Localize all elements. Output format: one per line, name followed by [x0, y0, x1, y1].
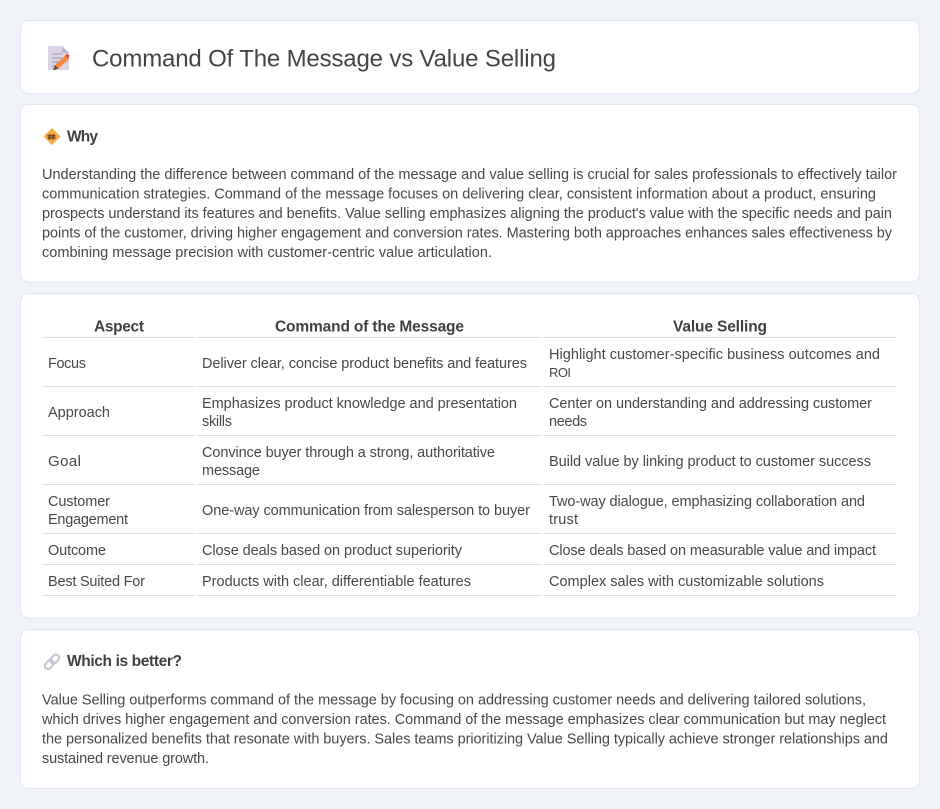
panel: which is better	[20, 630, 920, 788]
table row: focus: ROI	[549, 365, 571, 380]
table row: goal: message	[202, 463, 260, 479]
table row: focus: Deliver clear, concise product benefits and features	[202, 356, 527, 372]
text block: why paragraph: Understanding the difference between command of the message and value selling is crucial for sales professionals to effectively tailor	[42, 167, 897, 183]
table row: best suited for: Products with clear, differentiable features	[202, 574, 471, 590]
text block: which is better paragraph: Value Selling outperforms command of the message by focusing on addressing customer needs and delivering tailored solutions,	[42, 692, 866, 708]
icon: link	[43, 653, 61, 670]
text block: why paragraph	[42, 167, 897, 261]
table row: outcome: Close deals based on measurable value and impact	[549, 543, 876, 559]
table row: goal	[48, 445, 871, 479]
table row: goal: Convince buyer through a strong, authoritative	[202, 445, 495, 461]
table row: best suited for	[48, 574, 824, 590]
table row: customer engagement: Two-way dialogue, emphasizing collaboration and	[549, 494, 865, 510]
text block: why paragraph: prospects understand its features and benefits. Value selling emphasizes aligning the product's value with the specific needs and pain	[42, 206, 892, 222]
table header row	[94, 318, 767, 336]
text block: why paragraph: combining message precision with customer-centric value articulation.	[42, 245, 492, 261]
table row: approach: Approach	[48, 405, 110, 421]
table row: outcome: Outcome	[48, 543, 106, 559]
table row: focus: Highlight customer-specific business outcomes and	[549, 347, 880, 363]
text block: why paragraph: communication strategies. Command of the message focuses on delivering clear, consistent information about a product, ensuring	[42, 186, 876, 202]
table row: customer engagement: One-way communication from salesperson to buyer	[202, 503, 530, 519]
text block: which is better paragraph: the personalized benefits that resonate with buyers. Sales teams prioritizing Value Selling typically achieve stronger relationships and	[42, 732, 888, 748]
table header row: Value Selling	[673, 318, 767, 336]
table row: outcome: Close deals based on product superiority	[202, 543, 463, 559]
panel: header	[20, 20, 920, 94]
table row: focus: Focus	[48, 356, 86, 372]
icon: warning diamond	[44, 128, 60, 144]
title: Command Of The Message vs Value Selling	[92, 46, 556, 72]
table row: approach: skills	[202, 414, 232, 430]
table row: customer engagement	[48, 494, 865, 528]
heading: which is better: Which is better?	[67, 653, 182, 670]
table row: outcome	[48, 543, 876, 559]
panel: comparison table	[20, 294, 920, 618]
table header row: Aspect	[94, 318, 144, 336]
table row: approach	[48, 396, 872, 430]
text block: which is better paragraph	[41, 692, 888, 767]
table row: goal: Goal	[48, 453, 81, 470]
table row: goal: Build value by linking product to customer success	[549, 454, 871, 470]
table row: focus	[48, 347, 880, 380]
panel: why	[20, 104, 920, 282]
table row: customer engagement: Engagement	[48, 512, 128, 528]
text block: why paragraph: points of the customer, driving higher engagement and conversion rates. Mastering both approaches enhances sales effectiveness by	[42, 226, 893, 242]
table row: approach: Center on understanding and addressing customer	[549, 396, 872, 412]
icon: document with pencil	[48, 46, 70, 70]
table row: approach: Emphasizes product knowledge and presentation	[202, 396, 517, 412]
table row: customer engagement: Customer	[48, 494, 110, 510]
table row: customer engagement: trust	[549, 512, 578, 528]
table row: best suited for: Complex sales with customizable solutions	[549, 574, 824, 590]
text block: which is better paragraph: which drives higher engagement and conversion rates. Command of the message emphasizes clear communication but may neglect	[41, 712, 886, 728]
heading: why: Why	[67, 128, 98, 146]
table row: best suited for: Best Suited For	[48, 574, 145, 590]
table header row: Command of the Message	[275, 318, 464, 336]
text block: which is better paragraph: sustained revenue growth.	[42, 751, 209, 767]
table row: approach: needs	[549, 414, 587, 430]
